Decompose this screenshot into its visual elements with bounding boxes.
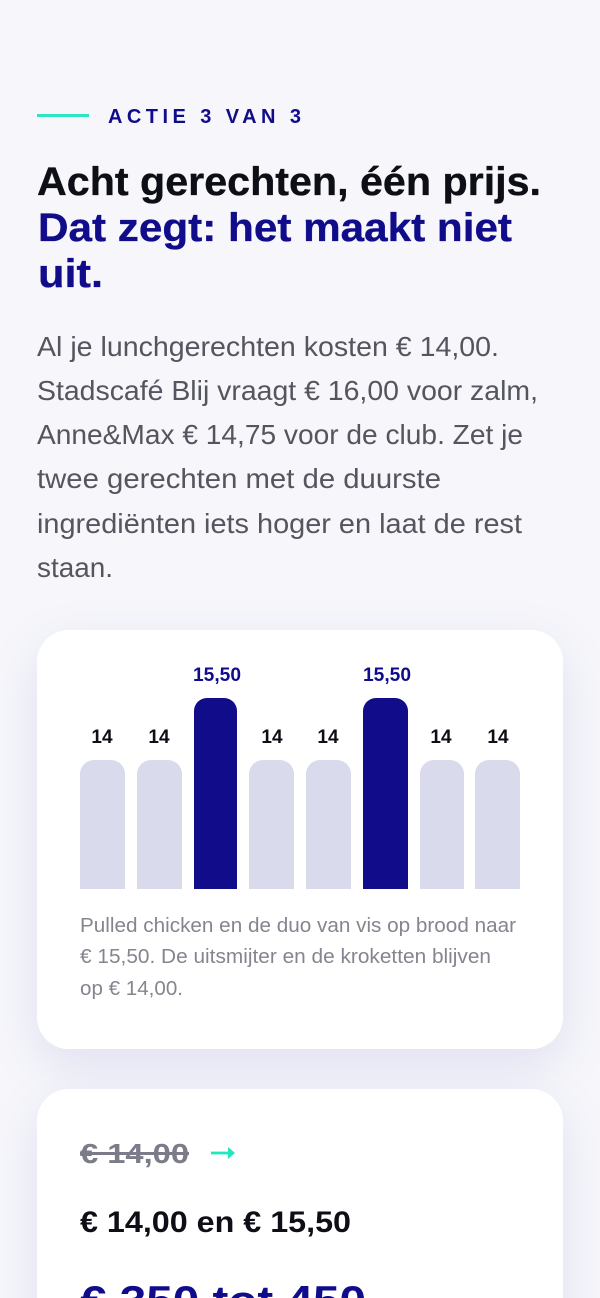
arrow bbox=[211, 1147, 235, 1159]
bar chart: 14 bbox=[487, 727, 509, 748]
bar chart: 14 bbox=[317, 727, 339, 748]
title: uit. bbox=[38, 252, 103, 296]
bar chart: 15,50 bbox=[363, 665, 411, 686]
body text: twee gerechten met de duurste bbox=[37, 463, 441, 494]
bar chart: 14 bbox=[91, 727, 113, 748]
bar chart: 14 bbox=[261, 727, 283, 748]
title: Acht gerechten, één prijs. bbox=[37, 160, 541, 204]
body text: Al je lunchgerechten kosten € 14,00. bbox=[37, 331, 499, 362]
title bbox=[37, 160, 541, 296]
body text: Stadscafé Blij vraagt € 16,00 voor zalm, bbox=[37, 375, 538, 406]
chart caption: € 15,50. De uitsmijter en de kroketten blijven bbox=[80, 946, 491, 968]
body text: Anne&Max € 14,75 voor de club. Zet je bbox=[37, 419, 523, 450]
new price: € 14,00 en € 15,50 bbox=[80, 1206, 351, 1239]
panel: price bars bbox=[37, 630, 563, 1049]
bar chart: 14 bbox=[148, 727, 170, 748]
title: Dat zegt: het maakt niet bbox=[38, 206, 512, 250]
body text: ingrediënten iets hoger en laat de rest bbox=[37, 508, 522, 539]
bar chart bbox=[80, 665, 520, 889]
bar chart: 15,50 bbox=[193, 665, 241, 686]
eyebrow: ACTIE 3 VAN 3 bbox=[108, 106, 301, 128]
bar chart: 14 bbox=[430, 727, 452, 748]
chart caption: op € 14,00. bbox=[80, 978, 183, 1000]
old price bbox=[80, 1144, 189, 1168]
panel: price change bbox=[37, 1089, 563, 1298]
chart caption bbox=[80, 915, 516, 1000]
chart caption: Pulled chicken en de duo van vis op brood naar bbox=[80, 915, 516, 937]
body text: staan. bbox=[37, 552, 113, 583]
body text bbox=[37, 331, 538, 583]
old price: € 14,00 bbox=[80, 1138, 189, 1169]
